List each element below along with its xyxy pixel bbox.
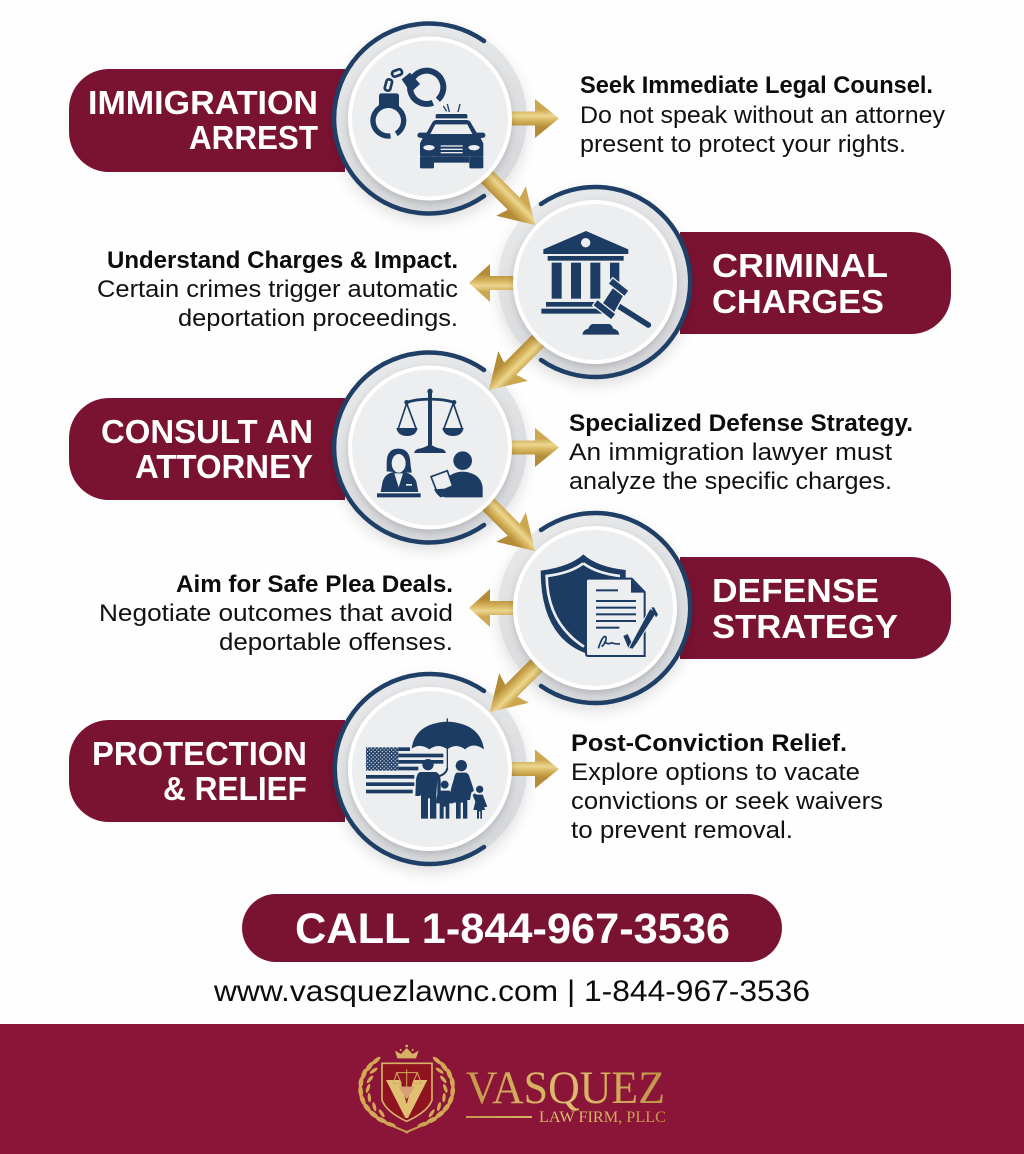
text: seek immediate legal counsel: present to protect your rights. xyxy=(580,131,906,158)
text: specialized defense strategy: An immigration lawyer must xyxy=(569,439,892,466)
arrow: step 5 right xyxy=(499,750,559,788)
heading: consult an attorney: CONSULT AN xyxy=(101,413,313,450)
heading: criminal charges: CRIMINAL xyxy=(712,247,888,284)
text: aim for safe plea deals: Aim for Safe Plea Deals. xyxy=(176,571,453,598)
heading: protection and relief xyxy=(92,735,307,807)
text: seek immediate legal counsel: Seek Immediate Legal Counsel. xyxy=(580,72,933,99)
arrow: step 1 right xyxy=(499,99,559,138)
text: aim for safe plea deals xyxy=(99,571,453,656)
text: post-conviction relief: Post-Conviction Relief. xyxy=(571,730,847,757)
heading: defense strategy xyxy=(712,572,898,645)
text: post-conviction relief xyxy=(571,730,883,844)
text: post-conviction relief: convictions or seek waivers xyxy=(571,788,883,815)
text: post-conviction relief: Explore options to vacate xyxy=(571,759,860,786)
text: understand charges and impact xyxy=(97,247,458,332)
arrow: step 4 left xyxy=(469,589,529,627)
heading: immigration arrest: ARREST xyxy=(189,119,318,156)
icon: flag, umbrella and family xyxy=(366,718,487,819)
circle bases with navy rings xyxy=(333,22,692,866)
text: specialized defense strategy: analyze the specific charges. xyxy=(569,468,892,495)
text: specialized defense strategy xyxy=(569,410,913,495)
arrow: step 4 to step 5 xyxy=(475,637,565,727)
logo: crest xyxy=(358,1045,455,1133)
icon: courthouse and gavel xyxy=(541,231,648,335)
text: understand charges and impact: Understand Charges & Impact. xyxy=(107,247,458,274)
arrow: step 3 right xyxy=(499,428,559,467)
pill: consult an attorney xyxy=(69,398,345,500)
text: aim for safe plea deals: deportable offenses. xyxy=(219,629,453,656)
logo: firm name: VASQUEZ xyxy=(466,1062,665,1114)
text: specialized defense strategy: Specialized Defense Strategy. xyxy=(569,410,913,437)
call button xyxy=(242,894,782,962)
pill: criminal charges xyxy=(680,232,951,334)
logo: firm name: LAW FIRM, PLLC xyxy=(539,1109,666,1126)
inner discs xyxy=(348,36,677,851)
heading: immigration arrest: IMMIGRATION xyxy=(88,84,318,121)
heading: consult an attorney xyxy=(101,413,313,485)
text: post-conviction relief: to prevent removal. xyxy=(571,817,793,844)
heading: immigration arrest xyxy=(88,84,318,156)
heading: protection and relief: PROTECTION xyxy=(92,735,307,772)
pill: protection and relief xyxy=(69,720,345,822)
icon: handcuffs and police car xyxy=(371,66,485,168)
text: seek immediate legal counsel: Do not speak without an attorney xyxy=(580,102,945,129)
heading: criminal charges: CHARGES xyxy=(712,283,884,320)
icon: scales and meeting xyxy=(377,389,483,497)
heading: criminal charges xyxy=(712,247,888,320)
text: understand charges and impact: deportation proceedings. xyxy=(178,305,458,332)
text: aim for safe plea deals: Negotiate outcomes that avoid xyxy=(99,600,453,627)
pill: immigration arrest xyxy=(69,69,345,172)
pill: defense strategy xyxy=(680,557,951,659)
text: seek immediate legal counsel xyxy=(580,72,945,158)
heading: defense strategy: DEFENSE xyxy=(712,572,879,609)
footer band xyxy=(0,1024,1024,1154)
icon: shield and signed document xyxy=(541,554,658,656)
arrow: step 3 to step 4 xyxy=(460,476,550,566)
arrow: step 1 to step 2 xyxy=(460,150,550,240)
text: understand charges and impact: Certain crimes trigger automatic xyxy=(97,276,458,303)
contact line: www.vasquezlawnc.com | 1-844-967-3536 xyxy=(213,975,810,1008)
arrow: step 2 left xyxy=(469,264,529,302)
heading: consult an attorney: ATTORNEY xyxy=(135,448,313,485)
arrow: step 2 to step 3 xyxy=(474,315,564,405)
heading: protection and relief: & RELIEF xyxy=(163,770,307,807)
heading: defense strategy: STRATEGY xyxy=(712,608,898,645)
call button: CALL 1-844-967-3536 xyxy=(295,905,730,953)
